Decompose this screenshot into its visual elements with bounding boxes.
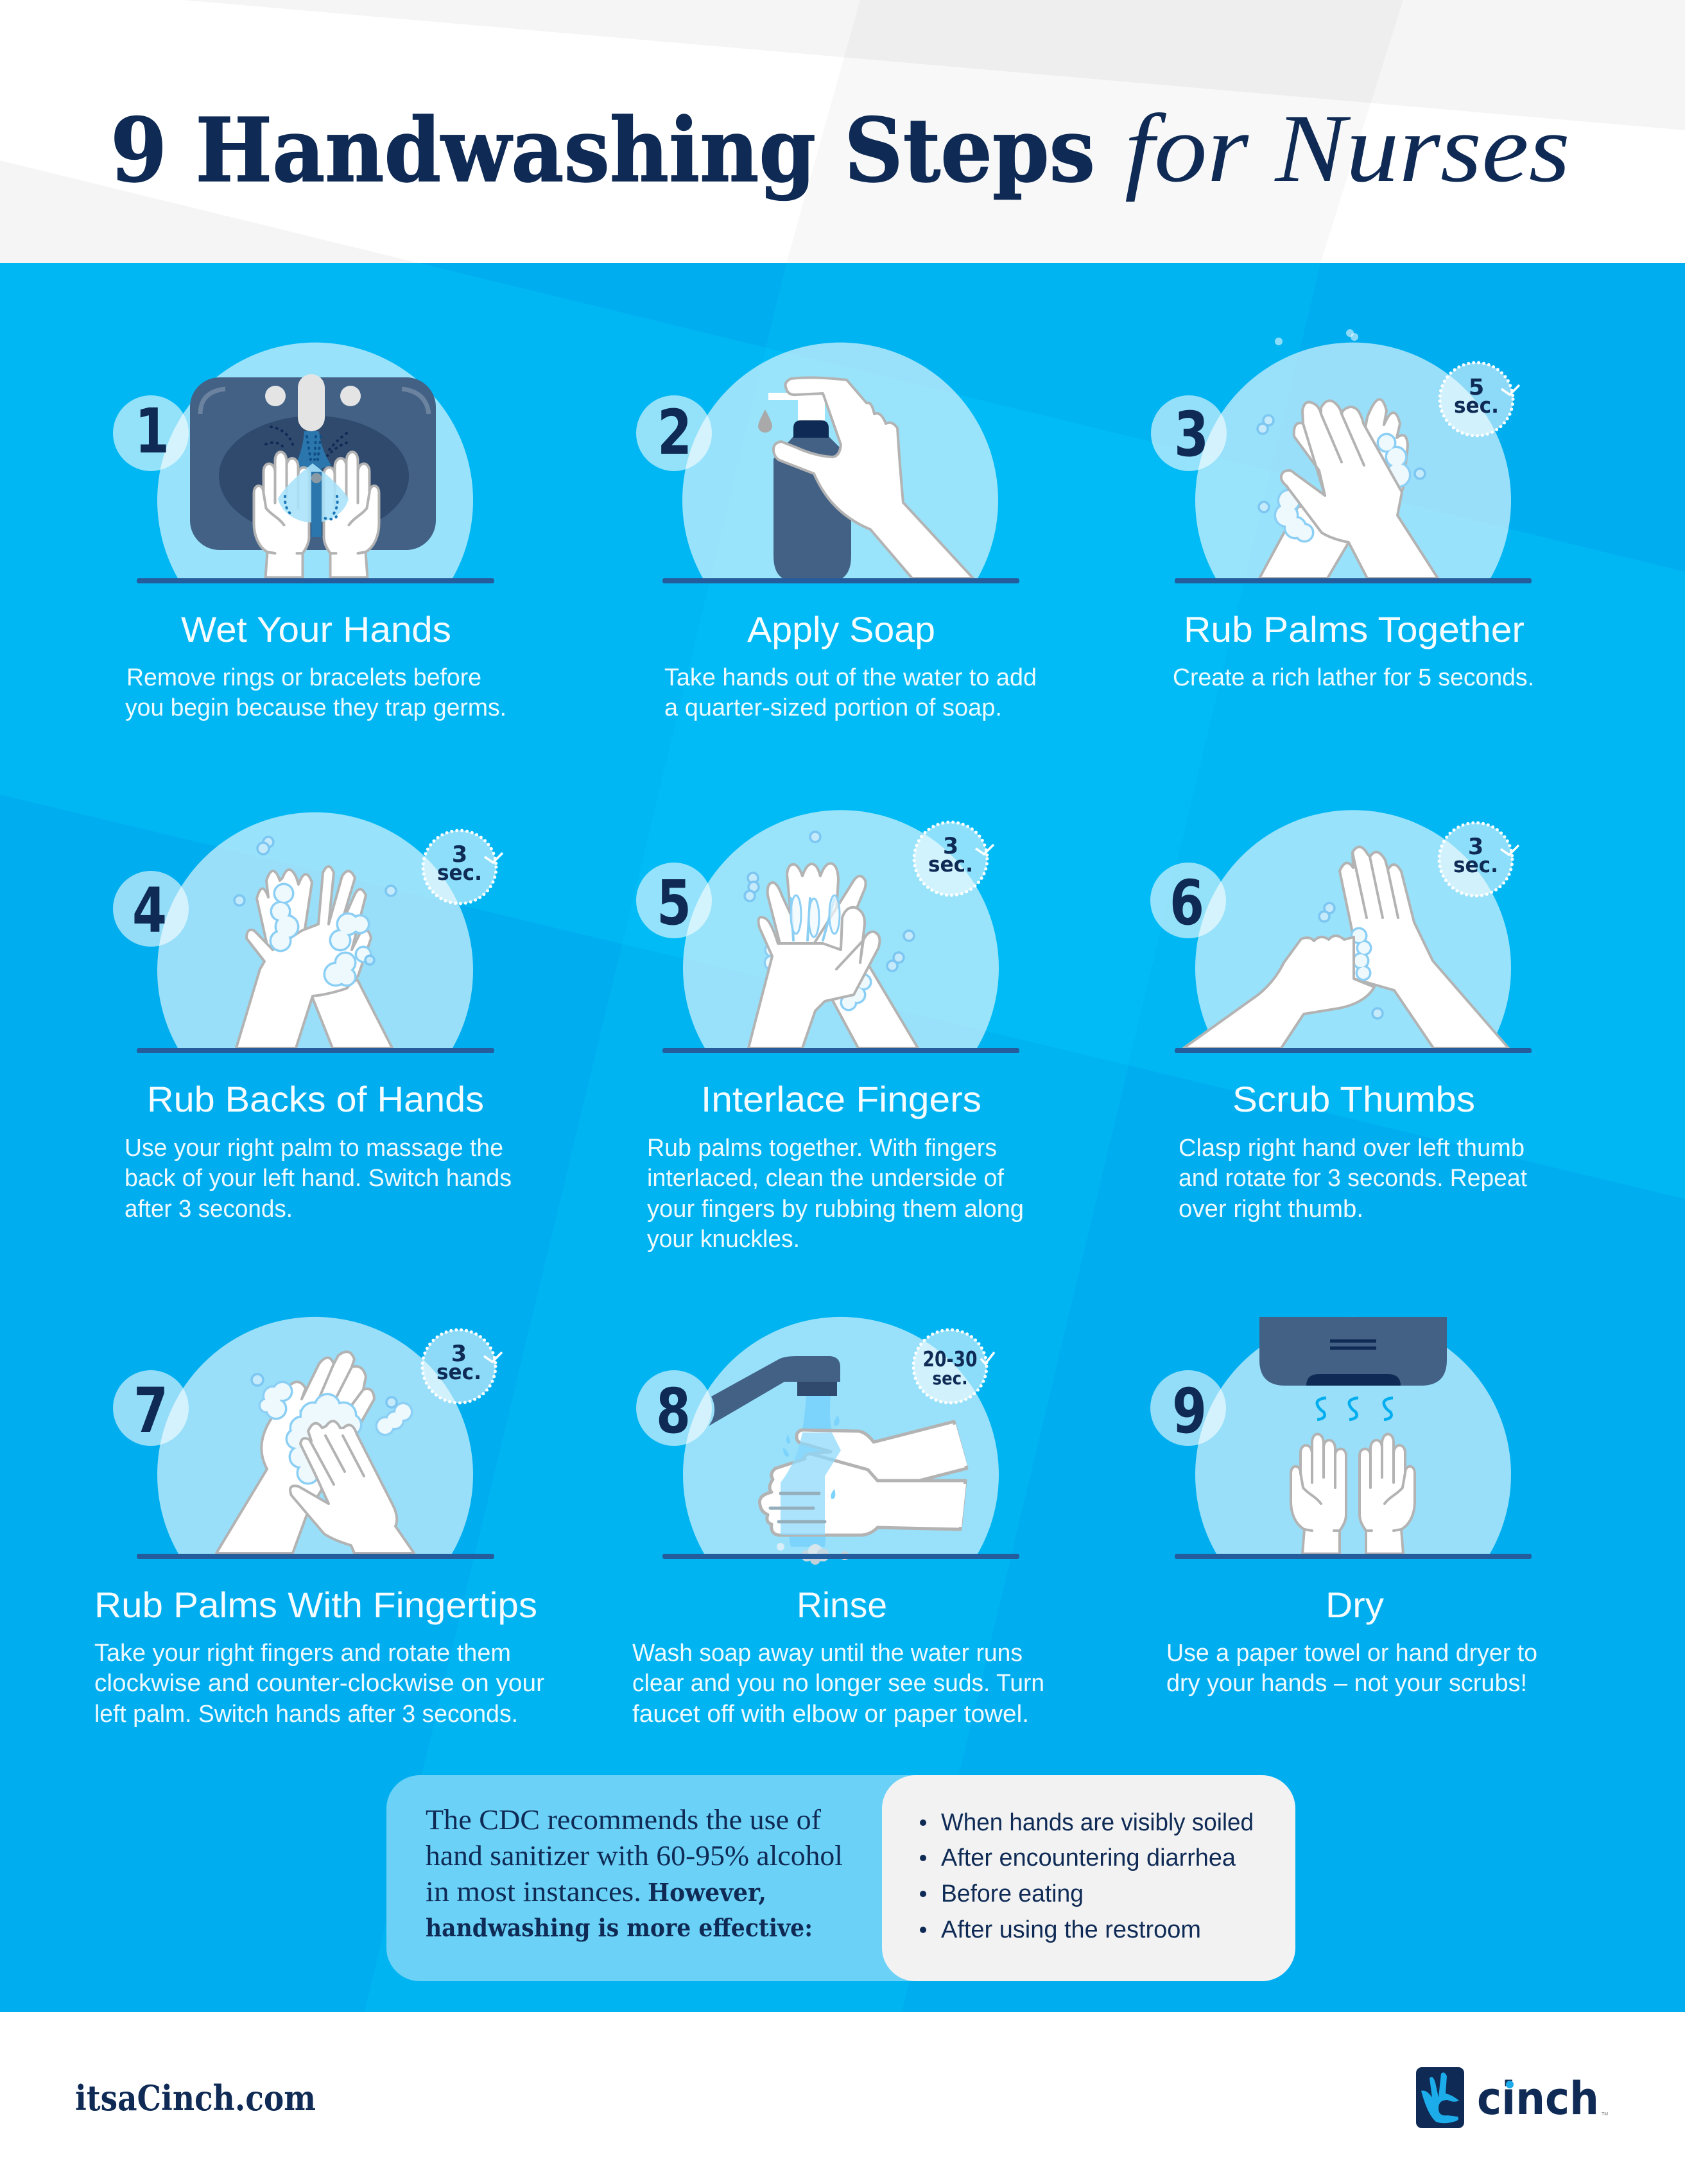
dome	[1195, 1317, 1511, 1554]
number badge 1	[113, 395, 189, 471]
text block	[94, 1640, 544, 1728]
timer badge 20-30 sec: 20-30	[923, 1346, 977, 1371]
text block: dry your hands – not your scrubs!	[1166, 1670, 1527, 1697]
footer url: itsaCinch.com	[75, 2077, 316, 2119]
text block: Remove rings or bracelets before	[126, 664, 481, 691]
shelf	[137, 578, 494, 583]
text block: sanitizer	[426, 1804, 843, 1942]
shelf	[662, 578, 1019, 583]
heading: Wet Your Hands	[181, 609, 451, 649]
number badge 4	[113, 871, 189, 947]
panel: left callout	[386, 1775, 964, 1981]
panel: step 7 rub palms with fingertips	[94, 1317, 544, 1728]
text block: sanitizer: in most instances.	[426, 1876, 641, 1907]
text block	[1166, 1640, 1537, 1697]
timer badge 3 sec	[1439, 823, 1519, 896]
number badge 3	[1151, 395, 1227, 471]
text block: and rotate for 3 seconds. Repeat	[1179, 1165, 1527, 1192]
wordmark: cinch	[1477, 2072, 1599, 2125]
list: when handwashing is more effective: When hands are visibly soiled	[941, 1809, 1254, 1836]
list: when handwashing is more effective	[920, 1809, 1254, 1943]
text block: Use your right palm to massage the	[125, 1135, 503, 1162]
shelf	[662, 1048, 1019, 1053]
text block: Rub palms together. With fingers	[647, 1135, 997, 1162]
number badge 8: 8	[656, 1375, 691, 1447]
shelf	[137, 1048, 494, 1053]
icon: hand logo	[1416, 2067, 1464, 2128]
text block: Take hands out of the water to add	[664, 664, 1037, 691]
timer badge 3 sec: 3	[452, 842, 467, 868]
dome	[1195, 810, 1511, 1048]
number badge 2	[636, 395, 712, 471]
timer badge 3 sec	[914, 822, 994, 895]
text block: sanitizer: hand sanitizer with 60-95% alcohol	[426, 1840, 843, 1871]
dome	[682, 343, 998, 578]
text block: clear and you no longer see suds. Turn	[632, 1670, 1044, 1697]
text block	[647, 1135, 1024, 1253]
heading: Apply Soap	[747, 609, 935, 649]
text block: over right thumb.	[1179, 1196, 1363, 1223]
timer badge 3 sec: sec.	[928, 852, 973, 877]
text block: Wash soap away until the water runs	[632, 1640, 1023, 1667]
list: when handwashing is more effective: Before eating	[941, 1880, 1084, 1907]
text block: sanitizer: The CDC recommends the use of	[426, 1804, 821, 1836]
logo: cinch: TM	[1602, 2112, 1608, 2117]
timer badge 3 sec	[423, 830, 503, 904]
text block: your knuckles.	[647, 1226, 800, 1253]
timer badge 5 sec	[1440, 363, 1519, 436]
text block: interlaced, clean the underside of	[647, 1165, 1004, 1192]
icon: scrubbing thumb	[1184, 847, 1508, 1048]
text block: left palm. Switch hands after 3 seconds.	[94, 1701, 518, 1728]
heading: Rinse	[797, 1585, 887, 1625]
header background	[0, 0, 1685, 263]
logo: cinch	[1416, 2067, 1608, 2128]
number badge 6: 6	[1170, 867, 1204, 939]
number badge 6	[1150, 863, 1226, 939]
panel: step 9 dry	[1150, 1317, 1537, 1697]
text block: after 3 seconds.	[125, 1196, 293, 1223]
timer badge 3 sec: sec.	[1453, 852, 1498, 877]
heading: Rub Palms Together	[1184, 609, 1525, 649]
timer badge 5 sec: 5	[1469, 375, 1484, 400]
text block: clockwise and counter-clockwise on your	[94, 1670, 544, 1697]
title	[110, 94, 1570, 202]
icon: interlaced fingers	[745, 832, 918, 1048]
number badge 1: 1	[135, 395, 169, 467]
shelf	[1175, 578, 1532, 583]
panel: step 3 rub palms together	[1151, 329, 1534, 691]
panel: right list	[882, 1775, 1295, 1981]
timer badge 5 sec: sec.	[1454, 393, 1499, 418]
dome	[157, 813, 473, 1048]
panel: step 4 rub backs of hands	[113, 813, 512, 1223]
panel: step 1 wet your hands	[113, 343, 506, 721]
heading: Rub Palms With Fingertips	[94, 1585, 537, 1625]
text block	[1179, 1135, 1527, 1223]
timer badge 3 sec: 3	[1468, 834, 1483, 860]
dome	[1195, 343, 1511, 578]
text block: Take your right fingers and rotate them	[94, 1640, 511, 1667]
timer badge 3 sec: 3	[451, 1341, 467, 1367]
timer badge 3 sec: 3	[943, 834, 958, 859]
icon: soap bottle and hand	[758, 377, 973, 578]
text block	[125, 1135, 512, 1223]
text block	[664, 664, 1037, 721]
panel: step 2 apply soap	[636, 343, 1037, 721]
heading: Scrub Thumbs	[1232, 1079, 1475, 1119]
dome	[683, 1317, 999, 1554]
number badge 8	[636, 1370, 712, 1447]
text block: Clasp right hand over left thumb	[1179, 1135, 1525, 1162]
shelf	[137, 1554, 494, 1559]
panel: step 8 rinse	[632, 1317, 1044, 1728]
text block: back of your left hand. Switch hands	[125, 1165, 512, 1192]
dome	[157, 1317, 473, 1554]
number badge 7: 7	[134, 1375, 168, 1447]
list: when handwashing is more effective: After using the restroom	[941, 1916, 1201, 1943]
timer badge 3 sec: sec.	[437, 860, 482, 885]
timer badge 20-30 sec: sec.	[932, 1368, 968, 1389]
icon: hands rubbing palms	[1257, 329, 1438, 578]
text block	[125, 664, 506, 721]
text block: faucet off with elbow or paper towel.	[632, 1701, 1029, 1728]
text block: you begin because they trap germs.	[125, 694, 506, 721]
timer badge 3 sec	[422, 1330, 502, 1403]
dome	[157, 343, 473, 578]
heading: Interlace Fingers	[701, 1079, 981, 1119]
number badge 2: 2	[657, 397, 692, 469]
shelf	[662, 1554, 1019, 1559]
icon: sink with running water and hands	[190, 374, 436, 578]
number badge 5	[636, 863, 712, 939]
icon: faucet and hands under water	[709, 1356, 967, 1565]
number badge 5: 5	[657, 867, 691, 939]
text block: a quarter-sized portion of soap.	[664, 694, 1002, 721]
text block: your fingers by rubbing them along	[647, 1196, 1024, 1223]
number badge 9	[1150, 1370, 1226, 1447]
number badge 7	[113, 1370, 189, 1447]
panel: step 6 scrub thumbs	[1150, 810, 1532, 1223]
icon: hand dryer and hands	[1259, 1317, 1447, 1554]
timer badge 20-30 sec	[913, 1330, 994, 1403]
list: when handwashing is more effective: After encountering diarrhea	[941, 1844, 1236, 1871]
number badge 9: 9	[1172, 1375, 1207, 1447]
heading: Rub Backs of Hands	[147, 1079, 484, 1119]
heading: Dry	[1326, 1585, 1384, 1625]
shelf	[1175, 1554, 1532, 1559]
timer badge 3 sec: sec.	[436, 1359, 481, 1384]
number badge 4: 4	[132, 875, 167, 947]
dome	[683, 810, 999, 1048]
number badge 3: 3	[1174, 399, 1209, 470]
shelf	[1175, 1048, 1532, 1053]
text block	[632, 1640, 1044, 1728]
icon: fingertips rubbing palm	[216, 1352, 414, 1553]
text block: Use a paper towel or hand dryer to	[1166, 1640, 1537, 1667]
text block: sanitizer: However,	[648, 1878, 766, 1907]
icon: hands rubbing backs	[234, 837, 396, 1048]
title: for Nurses	[1125, 94, 1570, 202]
callout: hand sanitizer recommendation	[386, 1775, 1295, 1981]
panel: step 5 interlace fingers	[636, 810, 1024, 1253]
text block: Create a rich lather for 5 seconds.	[1173, 664, 1534, 691]
title: 9 Handwashing Steps	[110, 99, 1095, 202]
text block: sanitizer: handwashing is more effective:	[426, 1913, 813, 1942]
